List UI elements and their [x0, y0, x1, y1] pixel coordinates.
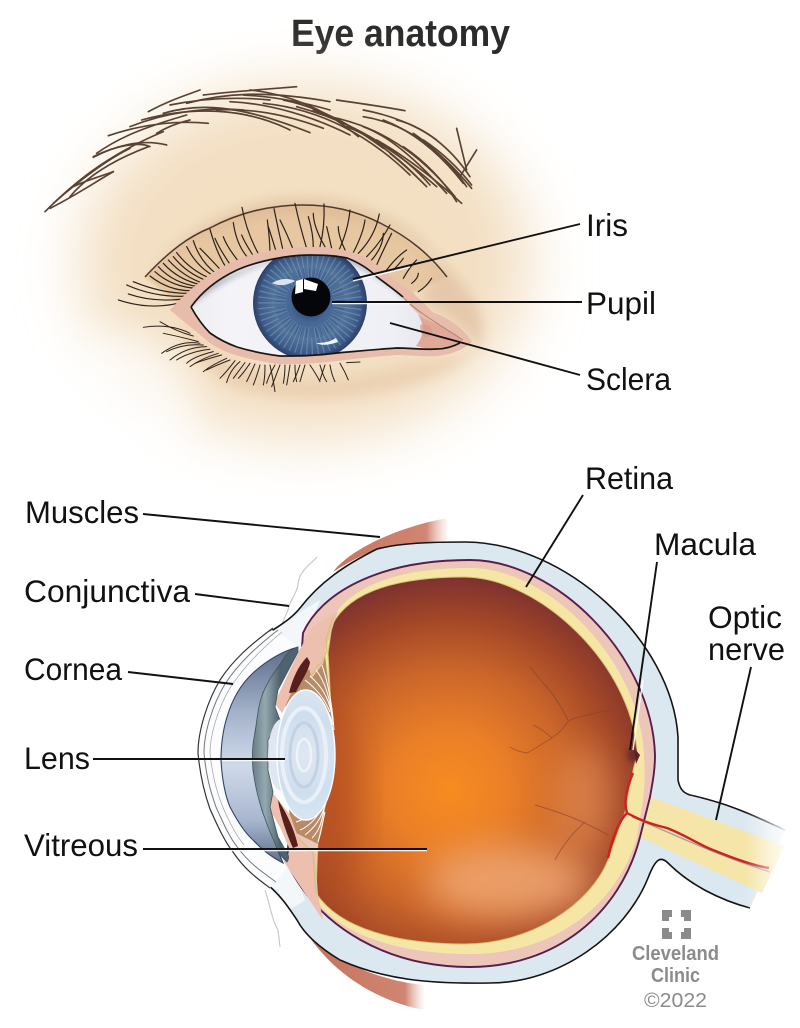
sclera whitening near limbus — [262, 600, 320, 910]
lens nucleus cap — [268, 719, 296, 791]
label: Retina: Retina — [585, 460, 673, 496]
sclera and iris — [192, 256, 462, 356]
logo wordmark line one: Cleveland — [632, 943, 719, 965]
sclera — [192, 258, 462, 356]
eyebrow — [45, 87, 477, 212]
logo wordmark line two: Clinic — [651, 965, 700, 987]
leader: Vitreous — [143, 848, 427, 850]
eyelid rim — [170, 247, 472, 364]
lower eyelashes — [143, 322, 360, 392]
iris — [253, 256, 367, 356]
retinal blood vessel — [608, 773, 769, 868]
leader highlight: Pupil — [332, 302, 410, 304]
logo block — [632, 910, 719, 1012]
macula spot — [627, 748, 641, 762]
sclera outline — [268, 542, 785, 983]
eyelid crease line — [145, 205, 447, 277]
leader highlight: Iris — [353, 267, 410, 281]
pupil — [292, 278, 330, 316]
front pink tissue bottom — [270, 792, 323, 920]
caruncle — [416, 315, 465, 349]
label: Conjunctiva: Conjunctiva — [24, 573, 190, 609]
iris highlight — [272, 279, 295, 285]
label: Vitreous: Vitreous — [24, 827, 138, 863]
lower highlight — [425, 846, 595, 918]
leader: Cornea — [128, 672, 233, 684]
leader: Conjunctiva — [195, 594, 289, 606]
leader highlight: Vitreous — [230, 850, 427, 852]
iris section — [252, 647, 298, 862]
skin shading — [80, 84, 530, 440]
pale lower-left fade — [55, 330, 195, 470]
zonule space — [285, 655, 335, 845]
lower lid shading — [175, 315, 475, 399]
label: Optic: Optic — [708, 599, 782, 635]
nerve core — [640, 797, 785, 893]
vitreous — [316, 577, 637, 944]
front pink yellow edge bottom — [298, 837, 316, 893]
label: Cornea: Cornea — [24, 651, 122, 687]
retinal vessels — [510, 667, 610, 860]
leader: Sclera — [390, 323, 580, 375]
anterior chamber — [221, 647, 298, 863]
eye outline — [191, 255, 460, 356]
label: Muscles: Muscles — [25, 494, 139, 530]
tear duct outline — [403, 297, 463, 340]
vitreous shading — [313, 667, 641, 918]
crease shadow above lid — [150, 198, 452, 275]
iris fibres — [272, 265, 348, 341]
choroid — [287, 560, 655, 967]
label: Pupil: Pupil — [586, 285, 656, 321]
leader: Optic nerve — [716, 667, 751, 820]
retina yellow band — [316, 568, 645, 954]
muscle bottom — [310, 938, 424, 1010]
panel: external eye illustration — [45, 84, 530, 470]
muscle top — [333, 518, 447, 572]
copyright: ©2022 — [644, 990, 707, 1012]
eyelid fold fill — [145, 205, 447, 305]
label: Sclera: Sclera — [586, 361, 671, 397]
front pink yellow edge top — [310, 617, 333, 677]
leader: Muscles — [143, 514, 380, 537]
label: Macula: Macula — [654, 526, 756, 562]
upper eyelashes — [118, 203, 432, 306]
nerve end fade — [745, 800, 800, 920]
leader: Retina — [526, 495, 583, 587]
label: nerve: nerve — [708, 631, 785, 667]
zonule fibres — [296, 665, 334, 842]
lens — [277, 690, 335, 820]
ciliary body dark — [278, 657, 310, 848]
label: Iris: Iris — [586, 207, 628, 243]
front pink tissue top — [275, 612, 337, 712]
left shade — [313, 700, 357, 900]
leader highlight: Lens — [222, 760, 285, 762]
title: Eye anatomy — [291, 13, 510, 55]
leader highlight: Macula — [633, 680, 643, 750]
panel: cross section of the eye — [198, 518, 800, 1010]
upper lid shadow — [192, 256, 406, 307]
conjunctiva fold top — [280, 557, 317, 628]
pupil highlight — [295, 279, 318, 294]
leader: Iris — [353, 224, 580, 279]
conjunctiva fold bottom — [265, 890, 280, 947]
icon: Cleveland Clinic cross — [662, 910, 691, 939]
sclera with optic sheath — [268, 542, 785, 983]
nerve edge shadow — [632, 817, 770, 872]
right socket shadow — [420, 262, 483, 352]
macula notch — [634, 748, 640, 764]
label: Lens: Lens — [24, 740, 90, 776]
right highlight — [557, 745, 613, 855]
cornea — [198, 628, 298, 888]
leader: Lens — [93, 758, 285, 760]
leader: Pupil — [332, 301, 582, 303]
leader: Macula — [630, 562, 657, 750]
